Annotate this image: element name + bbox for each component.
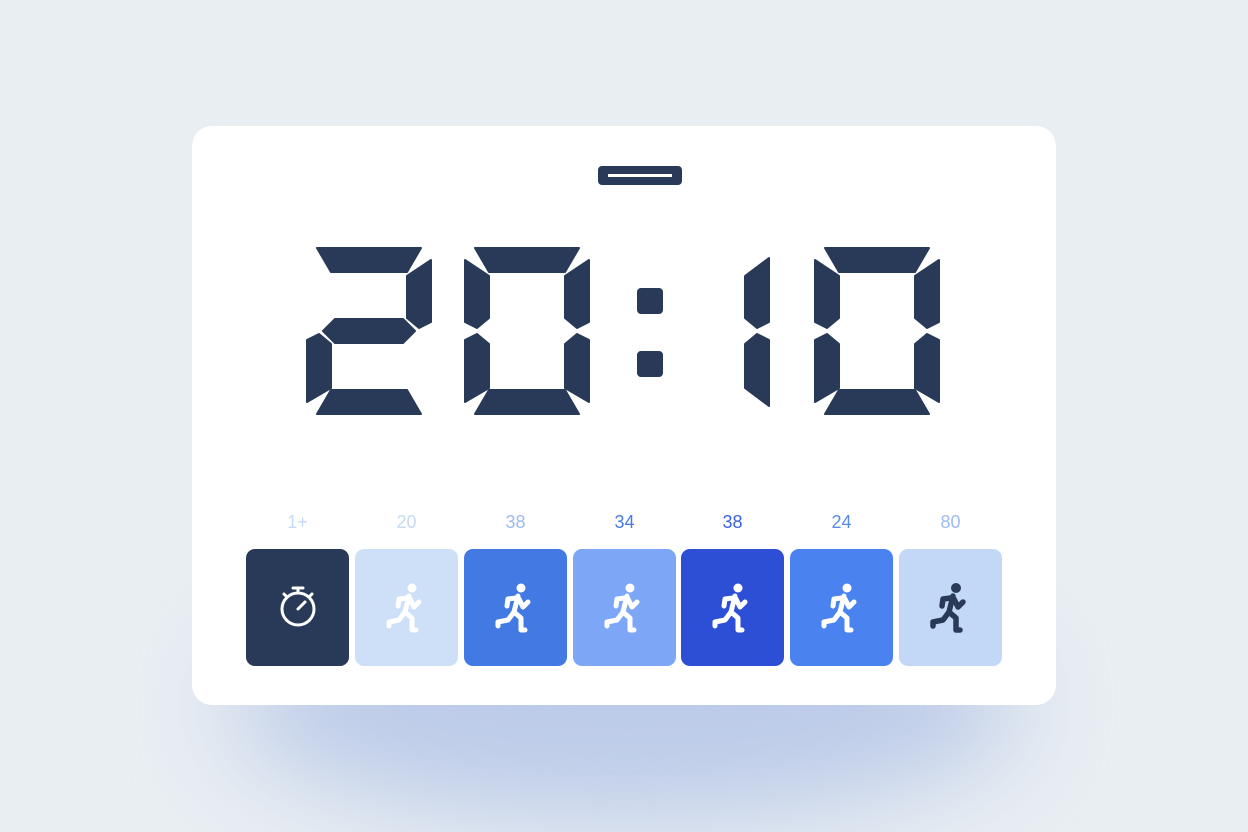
text: 20 [396,512,417,532]
value labels [287,512,961,532]
card [192,126,1056,705]
text: 38 [505,512,526,532]
text: 1+ [287,512,308,532]
tile: stopwatch [246,549,349,666]
tiles: runners [355,549,1002,666]
text: 38 [722,512,743,532]
pill indicator [598,166,682,185]
text: 34 [614,512,635,532]
text: 80 [940,512,961,532]
text: 24 [831,512,852,532]
